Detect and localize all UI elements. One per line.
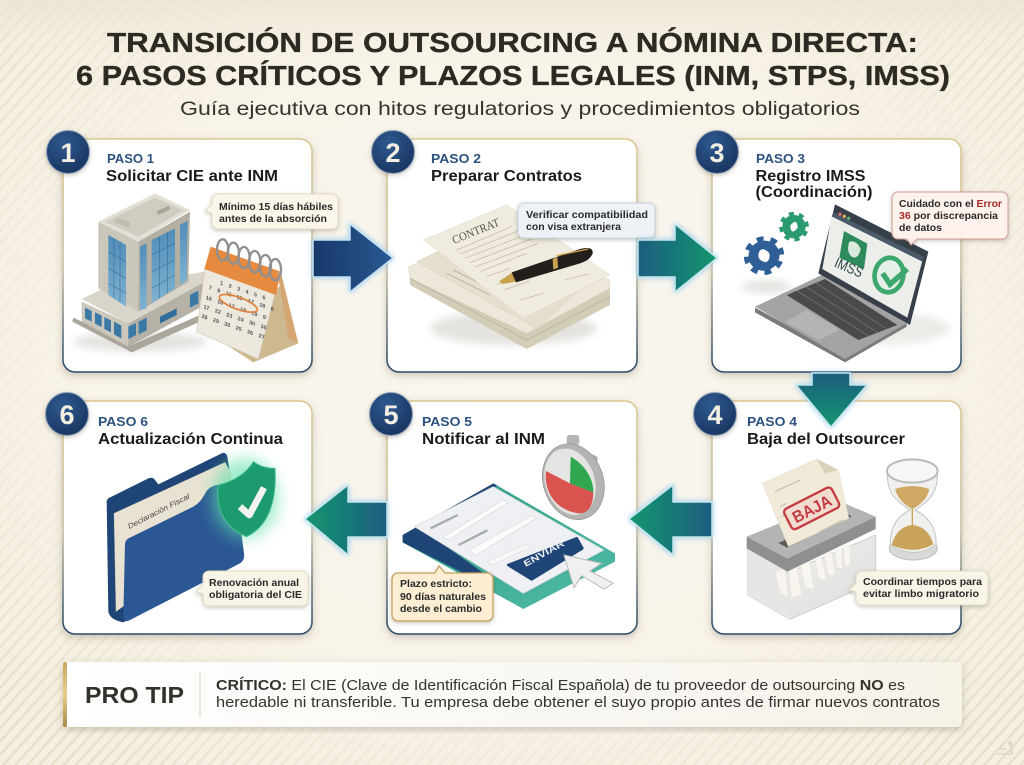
callout: error 36: de datos: [899, 222, 942, 234]
callout: error 36: Cuidado con el Error: [899, 198, 1002, 210]
heading paso 3: Registro IMSS: [756, 168, 866, 185]
panel: paso 2: [372, 130, 655, 372]
icon: shredder: [747, 500, 876, 619]
icon: building: [72, 193, 207, 352]
icon: contract papers and pen: CONTRAT: [450, 216, 501, 247]
icon: gears: [741, 210, 810, 293]
icon: hourglass: [887, 459, 938, 560]
callout: coordinar tiempos: [849, 571, 988, 605]
badge 6: [46, 392, 88, 436]
badge 1: [46, 130, 90, 174]
heading paso 6: Actualización Continua: [98, 431, 283, 448]
heading paso 1: PASO 1: [107, 152, 154, 166]
icon: watermark: [997, 742, 1012, 754]
callout: plazo estricto: [392, 566, 493, 621]
panel: paso 1: [46, 130, 338, 372]
heading paso 3: PASO 3: [756, 152, 805, 166]
icon: contract papers and pen: [408, 205, 610, 349]
badge 1: 1: [60, 138, 76, 168]
callout: plazo CIE: Mínimo 15 días hábiles: [219, 201, 333, 213]
heading paso 3: [756, 152, 872, 201]
icon: calendar: [197, 239, 298, 362]
icon: online form: ENVIAR: [522, 538, 567, 569]
pro tip label: PRO TIP: [85, 682, 184, 708]
callout: compatibilidad visa: [518, 203, 655, 238]
icon: baja document: BAJA: [789, 491, 835, 527]
badge 3: 3: [709, 138, 725, 168]
icon: shield check: [212, 458, 278, 538]
callout: plazo CIE: antes de la absorción: [219, 213, 327, 225]
card 4: [712, 401, 961, 634]
arrow: paso 1 to 2: [313, 224, 393, 292]
icon: calendar: 7 8 11 11 17 18 6: [208, 285, 274, 313]
callout: renovación anual: Renovación anual: [209, 577, 299, 589]
heading paso 1: Solicitar CIE ante INM: [106, 168, 278, 185]
icon: folder: [107, 453, 244, 622]
subtitle: Guía ejecutiva con hitos regulatorios y procedimientos obligatorios: [180, 98, 860, 120]
callout: compatibilidad visa: con visa extranjera: [526, 221, 621, 233]
panel: paso 5: [370, 392, 637, 634]
badge 5: [370, 392, 412, 436]
panel: paso 4: [694, 392, 988, 634]
arrow: paso 4 to 5: [629, 485, 712, 555]
heading paso 4: PASO 4: [747, 415, 797, 429]
heading paso 6: PASO 6: [98, 415, 148, 429]
heading paso 5: Notificar al INM: [422, 431, 545, 448]
title: 6 PASOS CRÍTICOS Y PLAZOS LEGALES (INM, STPS, IMSS): [76, 60, 950, 91]
badge 2: 2: [385, 138, 401, 168]
panel: paso 6: [46, 392, 312, 634]
heading paso 2: [431, 152, 582, 185]
badge 4: 4: [707, 400, 723, 430]
callout: plazo CIE: [205, 194, 338, 229]
icon: online form: [403, 483, 615, 609]
card 3: [712, 139, 961, 372]
badge 3: [696, 130, 738, 174]
icon: laptop IMSS: [755, 204, 950, 362]
card 1: [63, 139, 312, 372]
heading paso 5: [422, 415, 545, 448]
icon: baja document: [762, 459, 849, 547]
icon: calendar: 1 2 3 4 5 6: [220, 280, 266, 302]
callout: plazo estricto: 90 días naturales: [400, 591, 486, 603]
heading paso 4: [747, 415, 905, 448]
icon: folder: Declaración Fiscal: [126, 492, 191, 531]
badge 5: 5: [383, 400, 399, 430]
heading paso 6: [98, 415, 283, 448]
icon: stopwatch: [533, 435, 614, 528]
heading paso 4: Baja del Outsourcer: [747, 431, 905, 448]
pro tip text: heredable ni transferible. Tu empresa debe obtener el suyo propio antes de firmar nuevos contratos: [216, 695, 940, 711]
icon: calendar: 28 29 30 25 26 27: [201, 314, 265, 341]
card 6: [63, 401, 312, 634]
card 5: [387, 401, 637, 634]
panel: pro tip: [63, 662, 962, 727]
callout: coordinar tiempos: Coordinar tiempos para: [863, 576, 982, 588]
heading paso 1: [106, 152, 278, 185]
callout: error 36: 36 por discrepancia: [899, 210, 998, 222]
arrow: paso 5 to 6: [305, 485, 387, 555]
badge 4: [694, 392, 736, 436]
callout: coordinar tiempos: evitar limbo migratorio: [863, 588, 979, 600]
pro tip background: [63, 662, 962, 727]
heading paso 2: Preparar Contratos: [431, 168, 582, 185]
callout: error 36: [892, 192, 1008, 245]
card 2: [387, 139, 637, 372]
heading paso 2: PASO 2: [431, 152, 481, 166]
arrow: paso 2 to 3: [638, 224, 717, 292]
icon: laptop IMSS: IMSS: [832, 255, 865, 282]
callout: plazo estricto: Plazo estricto:: [400, 578, 472, 590]
arrow: paso 3 to 4: [796, 373, 867, 427]
panel: paso 3: [696, 130, 1008, 372]
badge 6: 6: [59, 400, 75, 430]
callout: renovación anual: obligatoria del CIE: [209, 589, 302, 601]
heading paso 5: PASO 5: [422, 415, 472, 429]
callout: renovación anual: [196, 571, 308, 606]
callout: compatibilidad visa: Verificar compatibilidad: [526, 209, 648, 221]
pro tip text: [216, 677, 940, 711]
pro tip text: CRÍTICO: El CIE (Clave de Identificación Fiscal Española) de tu proveedor de outsourcing NO es: [216, 677, 905, 694]
icon: calendar: 17 22 23 24 30 30: [203, 304, 267, 332]
title: TRANSICIÓN DE OUTSOURCING A NÓMINA DIRECTA:: [107, 27, 918, 58]
icon: calendar: 16 16 17 18 19 9: [205, 295, 266, 321]
callout: plazo estricto: desde el cambio: [400, 603, 482, 615]
badge 2: [372, 130, 414, 174]
heading paso 3: (Coordinación): [756, 184, 872, 201]
title: [76, 27, 950, 91]
